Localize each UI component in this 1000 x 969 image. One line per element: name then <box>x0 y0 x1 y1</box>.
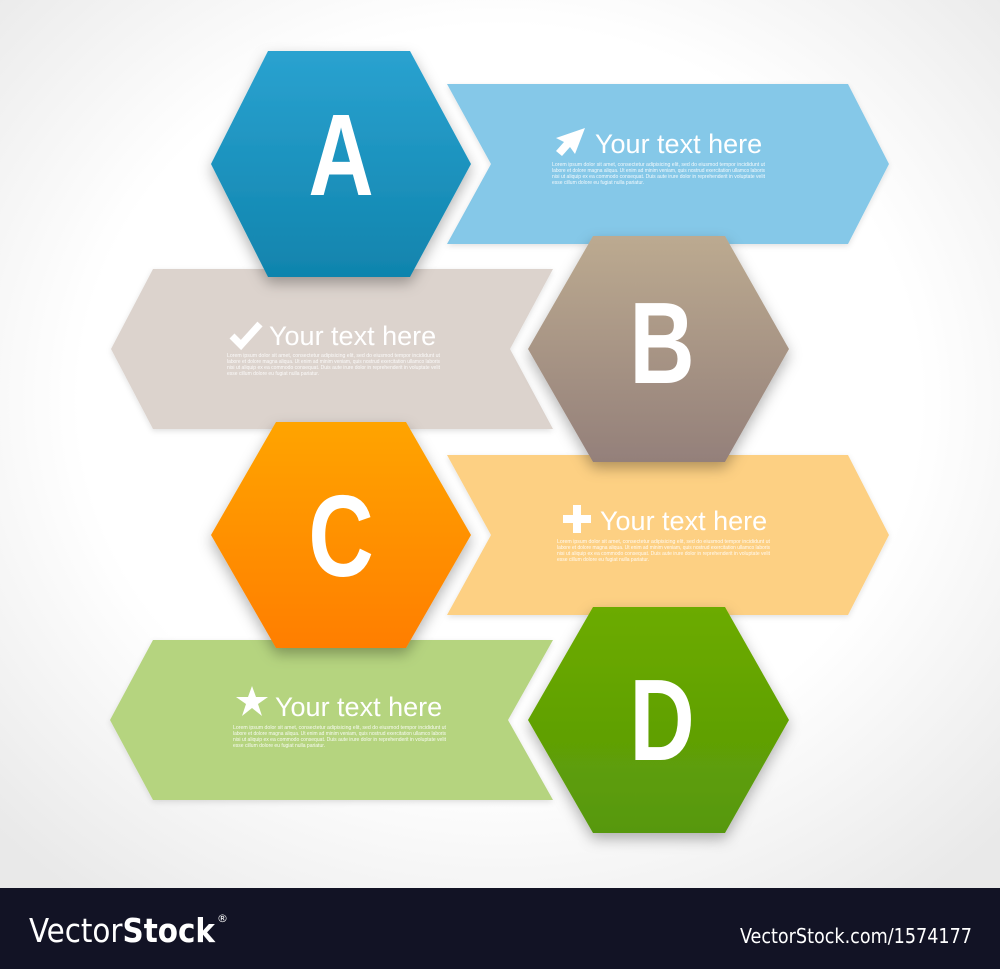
body text D: esse cillum dolore eu fugiat nulla pariatur. <box>233 743 325 749</box>
heading B: Your text here <box>269 321 436 351</box>
body text C: nisi ut aliquip ex ea commodo consequat. Duis aute irure dolor in reprehenderit in voluptate velit <box>557 551 771 557</box>
body text D <box>233 725 447 749</box>
heading C: Your text here <box>600 506 767 536</box>
body text C: esse cillum dolore eu fugiat nulla pariatur. <box>557 557 649 563</box>
body text C: labore et dolore magna aliqua. Ut enim ad minim veniam, quis nostrud exercitation ullamco laboris <box>557 545 770 551</box>
body text B <box>227 353 441 377</box>
hexagon B <box>528 236 789 462</box>
body text D: Lorem ipsum dolor sit amet, consectetur adipisicing elit, sed do eiusmod tempor incididunt ut <box>233 725 447 731</box>
body text A: nisi ut aliquip ex ea commodo consequat. Duis aute irure dolor in reprehenderit in voluptate velit <box>552 174 766 180</box>
body text C <box>557 539 771 563</box>
body text B: nisi ut aliquip ex ea commodo consequat. Duis aute irure dolor in reprehenderit in voluptate velit <box>227 365 441 371</box>
heading D: Your text here <box>275 692 442 722</box>
body text D: nisi ut aliquip ex ea commodo consequat. Duis aute irure dolor in reprehenderit in voluptate velit <box>233 737 447 743</box>
arrow panel C <box>447 455 889 615</box>
arrow panel D <box>110 640 553 800</box>
icon: cursor arrow <box>556 128 585 156</box>
body text C: Lorem ipsum dolor sit amet, consectetur adipisicing elit, sed do eiusmod tempor incididunt ut <box>557 539 771 545</box>
hexagon B: B <box>629 279 695 409</box>
heading A: Your text here <box>595 129 762 159</box>
icon: check <box>232 324 260 345</box>
icon: star <box>236 686 268 716</box>
body text B: Lorem ipsum dolor sit amet, consectetur adipisicing elit, sed do eiusmod tempor incididunt ut <box>227 353 441 359</box>
body text B: esse cillum dolore eu fugiat nulla pariatur. <box>227 371 319 377</box>
body text A <box>552 162 766 186</box>
body text A: Lorem ipsum dolor sit amet, consectetur adipisicing elit, sed do eiusmod tempor incididunt ut <box>552 162 766 168</box>
body text D: labore et dolore magna aliqua. Ut enim ad minim veniam, quis nostrud exercitation ullamco laboris <box>233 731 446 737</box>
footer url: VectorStock.com/1574177 <box>740 924 972 948</box>
hexagon D <box>528 607 789 833</box>
arrow panel B <box>111 269 553 429</box>
body text A: labore et dolore magna aliqua. Ut enim ad minim veniam, quis nostrud exercitation ullamco laboris <box>552 168 765 174</box>
hexagon A: A <box>308 91 374 221</box>
hexagon C: C <box>308 472 374 602</box>
footer logo: VectorStock <box>29 911 216 950</box>
arrow panel A <box>447 84 889 244</box>
hexagon A <box>211 51 471 277</box>
hexagon D: D <box>629 656 695 786</box>
body text A: esse cillum dolore eu fugiat nulla pariatur. <box>552 180 644 186</box>
body text B: labore et dolore magna aliqua. Ut enim ad minim veniam, quis nostrud exercitation ullamco laboris <box>227 359 440 365</box>
icon: plus <box>563 505 591 533</box>
hexagon C <box>211 422 471 648</box>
footer bar: ® <box>217 912 228 925</box>
footer bar <box>0 888 1000 969</box>
